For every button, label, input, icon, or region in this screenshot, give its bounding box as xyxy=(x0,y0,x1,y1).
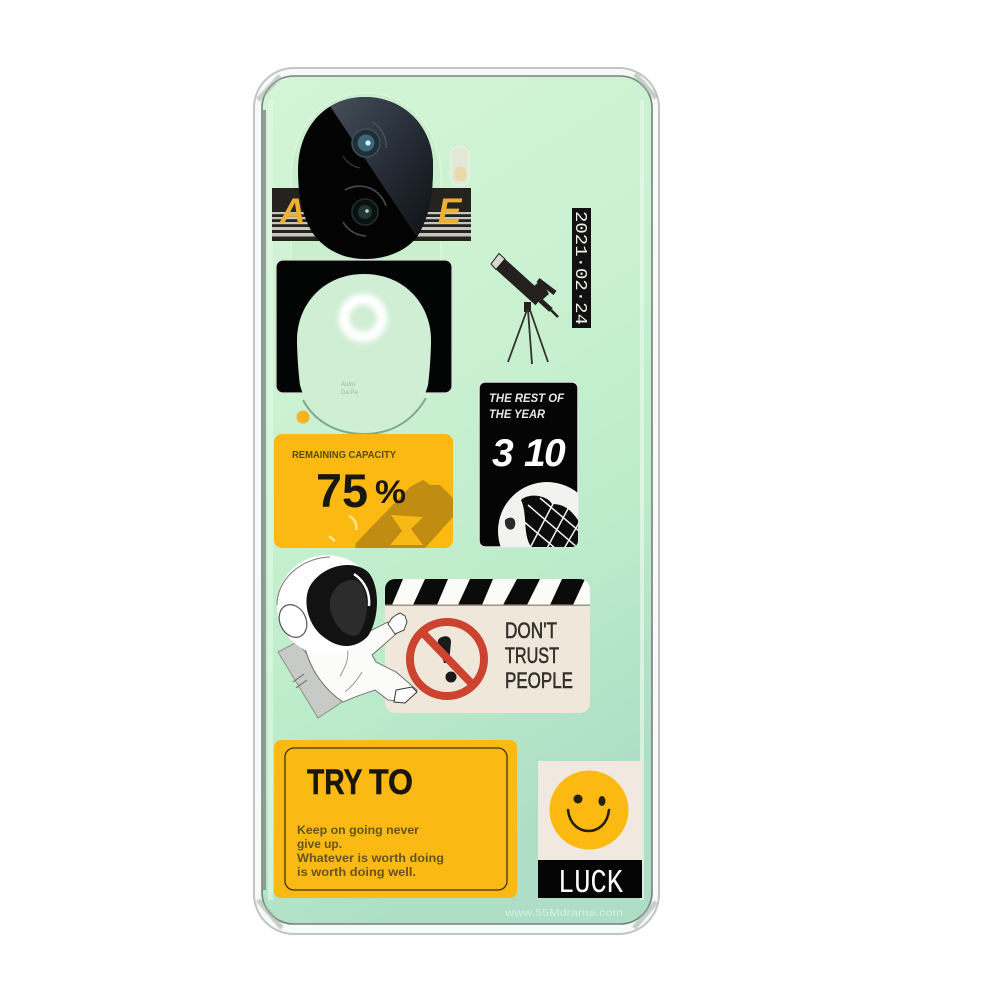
sticker: don't trust people: TRUST xyxy=(505,643,559,668)
sticker: luck smiley xyxy=(538,761,642,902)
watermark: www.55Mdrama.com xyxy=(504,907,623,919)
sticker: try to xyxy=(274,740,517,898)
date stamp: 2021·02·24 xyxy=(570,211,589,325)
phone case xyxy=(254,68,659,934)
sticker: apex banner: E xyxy=(438,192,463,231)
sticker: remaining capacity: % xyxy=(375,474,406,510)
backpack xyxy=(278,642,345,718)
boot xyxy=(394,687,417,703)
sticker: apex banner xyxy=(272,188,471,241)
lower module disc: Da Pa xyxy=(341,390,358,396)
body text: is worth doing well. xyxy=(297,867,416,879)
sticker: try to: TRY xyxy=(307,763,362,802)
body text: Keep on going never xyxy=(297,825,420,837)
flash xyxy=(451,147,469,185)
body text: Whatever is worth doing xyxy=(297,853,444,865)
camera island xyxy=(298,90,440,259)
helmet xyxy=(277,555,377,655)
sticker: remaining capacity: 75 xyxy=(316,464,368,517)
sticker: luck smiley: LUCK xyxy=(558,865,623,902)
lower lens xyxy=(343,186,386,236)
sticker: rest of the year xyxy=(478,381,579,548)
sticker: try to: TO xyxy=(369,763,413,802)
sticker: don't trust people: DON'T xyxy=(505,618,557,643)
body text: give up. xyxy=(297,839,342,851)
sticker: black panel xyxy=(276,260,452,393)
lower module disc: Aufru xyxy=(341,382,355,388)
sticker: rest of the year: 310 xyxy=(492,432,566,475)
body text xyxy=(297,825,444,879)
sticker: apex banner: A xyxy=(279,192,305,231)
sticker: don't trust people: PEOPLE xyxy=(505,668,573,693)
glove xyxy=(388,613,407,634)
upper lens xyxy=(343,122,386,168)
icon: telescope xyxy=(491,254,558,364)
icon: prohibition sign xyxy=(410,622,484,696)
sticker: rest of the year: THE YEAR xyxy=(489,407,545,421)
icon: smiley xyxy=(550,770,628,850)
body xyxy=(303,622,417,702)
sticker: don't trust people xyxy=(385,579,590,713)
icon: globe xyxy=(498,482,578,547)
sticker: rest of the year: THE REST OF xyxy=(489,391,565,405)
sticker: remaining capacity xyxy=(274,434,453,548)
camera module outline xyxy=(291,93,441,432)
sticker: remaining capacity: REMAINING CAPACITY xyxy=(292,450,396,461)
lower module disc xyxy=(297,274,431,434)
orange dot xyxy=(296,410,310,424)
sticker: astronaut xyxy=(274,555,417,718)
clapper stripes xyxy=(385,579,590,605)
icon: battery shadow xyxy=(355,480,453,548)
